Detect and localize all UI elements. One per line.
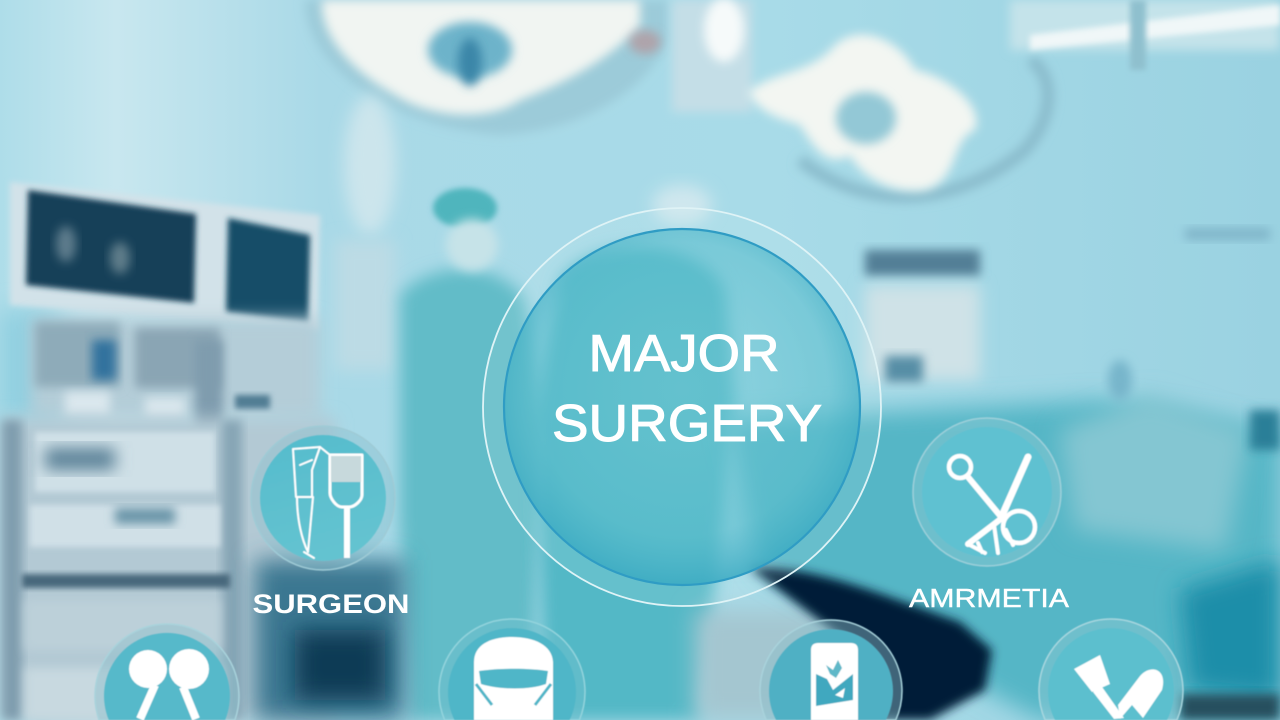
icon: pills (1039, 619, 1183, 720)
table and drapes (725, 228, 1280, 720)
surgical lights (305, 0, 1280, 197)
icon: surgeon iv bags (251, 426, 395, 570)
label: amrmetia: AMRMETIA (909, 583, 1070, 613)
icon: lungs (95, 624, 239, 720)
title: major surgery: MAJOR (588, 325, 780, 383)
label: surgeon: SURGEON (252, 589, 410, 619)
icon: medicine bottle (760, 620, 902, 720)
icon: surgical mask and cap (439, 619, 585, 720)
surgical staff (255, 95, 835, 720)
monitors and equipment (0, 182, 335, 720)
central circle: major surgery (483, 208, 881, 606)
icon: scissors (913, 418, 1061, 566)
title line 2: SURGERY (552, 395, 822, 453)
